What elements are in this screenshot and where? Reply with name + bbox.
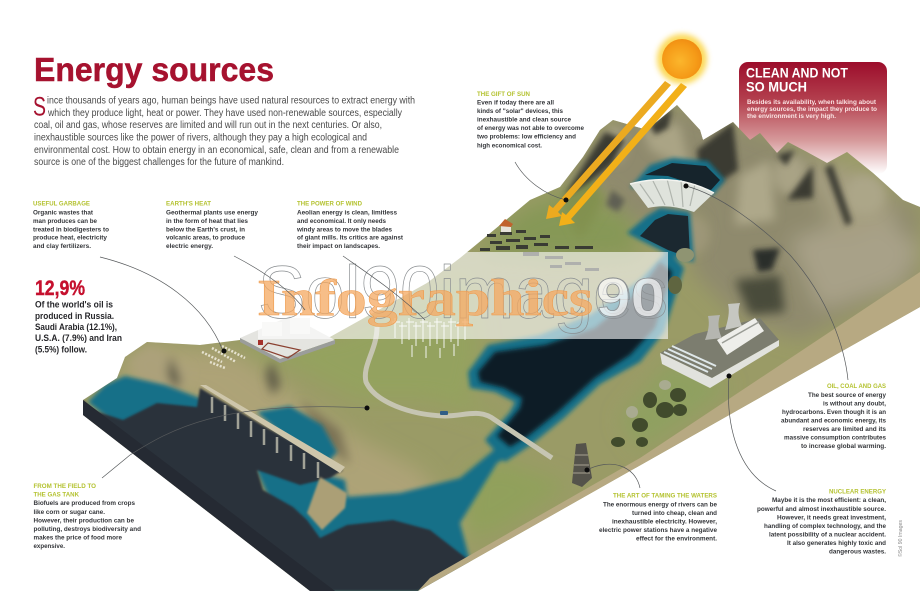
text block: the gift of sun: [477, 91, 584, 149]
watermark: Infographics: [257, 270, 593, 327]
sun: [657, 34, 707, 84]
text block: the art of taming the waters: electric power stations have a negative: [599, 527, 717, 534]
hydro tower: [572, 443, 592, 487]
intro text: source is one of the biggest challenges for the future of mankind.: [34, 157, 284, 168]
watermark: Sol90images: [258, 251, 668, 334]
terrain block illustration: [60, 90, 920, 591]
text block: nuclear energy: handling of complex technology, and the: [764, 523, 886, 530]
text block: from the field to the gas tank: polluting, destroys biodiversity and: [34, 526, 141, 533]
text block: the gift of sun: of energy was not able to overcome: [477, 125, 584, 132]
wind farm: [392, 318, 469, 358]
title: Energy sources: [34, 52, 274, 89]
text block: nuclear energy: [757, 488, 887, 556]
callout: clean and not so much: CLEAN AND NOT: [746, 66, 849, 80]
car: [440, 411, 448, 415]
text block: nuclear energy: Maybe it is the most efficient: a clean,: [772, 497, 886, 504]
text block: useful garbage: man produces can be: [33, 218, 97, 225]
text block: the power of wind: Aeolian energy is clean, limitless: [297, 209, 397, 216]
text block: oil, coal and gas: abundant and economic energy, its: [781, 418, 886, 424]
text block: from the field to the gas tank: FROM THE FIELD TO: [34, 483, 96, 490]
intro text: S: [33, 92, 46, 122]
text block: useful garbage: [33, 200, 109, 250]
text block: from the field to the gas tank: expensive.: [34, 543, 65, 550]
text block: useful garbage: produce heat, electricity: [33, 235, 107, 242]
statistic: oil production: Of the world's oil is: [35, 300, 113, 310]
statistic: oil production: (5.5%) follow.: [35, 344, 87, 354]
text block: useful garbage: USEFUL GARBAGE: [33, 200, 91, 208]
text block: the power of wind: windy areas to move the blades: [296, 226, 392, 233]
text block: the gift of sun: THE GIFT OF SUN: [477, 91, 530, 98]
callout: clean and not so much: Besides its availability, when talking about: [747, 99, 877, 106]
arrow: sun rays: [546, 81, 687, 226]
text block: the art of taming the waters: turned into cheap, clean and: [632, 510, 717, 517]
text block: from the field to the gas tank: However, their production can be: [34, 518, 134, 524]
text block: oil, coal and gas: massive consumption contributes: [784, 434, 886, 442]
text block: useful garbage: Organic wastes that: [33, 209, 94, 216]
text block: the gift of sun: high economical cost.: [477, 142, 542, 149]
geothermal plant: [240, 316, 335, 363]
text block: oil, coal and gas: hydrocarbons. Even though it is an: [782, 409, 886, 416]
text block: nuclear energy: dangerous wastes.: [829, 548, 886, 556]
text block: nuclear energy: latent possibility of a nuclear accident.: [769, 532, 886, 538]
text block: earth's heat: in the form of heat that lies: [166, 218, 248, 225]
text block: earth's heat: Geothermal plants use energy: [166, 209, 258, 216]
statistic: oil production: U.S.A. (7.9%) and Iran: [35, 333, 122, 343]
text block: the gift of sun: inexhaustible and clean source: [477, 117, 571, 124]
text block: from the field to the gas tank: like corn or sugar cane.: [34, 509, 105, 516]
text block: the gift of sun: two problems: low efficiency and: [477, 134, 576, 141]
text block: earth's heat: [166, 200, 258, 250]
text block: nuclear energy: powerful and almost inexhaustible source.: [757, 506, 886, 513]
text block: the power of wind: [296, 200, 404, 250]
nuclear power plant: [660, 303, 779, 388]
text block: the power of wind: THE POWER OF WIND: [297, 200, 362, 208]
intro text: inexhaustible sources like the power of rivers, although they pay a high ecological and: [34, 132, 367, 144]
text block: oil, coal and gas: OIL, COAL AND GAS: [827, 383, 887, 390]
statistic: oil production: Saudi Arabia (12.1%),: [35, 322, 117, 332]
text block: the gift of sun: Even if today there are all: [477, 100, 554, 106]
house: [499, 219, 513, 232]
text block: oil, coal and gas: is without any doubt,: [823, 400, 886, 408]
text block: the power of wind: and economical. It only needs: [297, 218, 386, 225]
text block: earth's heat: electric energy.: [166, 243, 213, 250]
text block: nuclear energy: It also generates highly toxic and: [787, 540, 886, 547]
watermark: 90: [596, 268, 665, 328]
dark solar fields: [480, 230, 599, 271]
text block: oil, coal and gas: The best source of energy: [808, 392, 886, 399]
statistic: oil production: [35, 277, 122, 354]
text block: earth's heat: EARTH'S HEAT: [166, 200, 211, 208]
text block: the art of taming the waters: effect for the environment.: [636, 536, 717, 542]
text block: the gift of sun: kinds of "solar" devices, this: [477, 108, 563, 115]
intro text: coal, oil and gas, whose reserves are limited and will run out in the next centuries. Or also,: [34, 120, 382, 131]
text block: from the field to the gas tank: makes the price of food more: [34, 534, 122, 542]
text block: oil, coal and gas: reserves are limited and its: [803, 426, 886, 433]
leader lines and dots: [100, 162, 848, 491]
text block: from the field to the gas tank: [34, 483, 141, 550]
text block: the power of wind: their impact on landscapes.: [297, 243, 380, 250]
text block: from the field to the gas tank: Biofuels are produced from crops: [34, 500, 135, 507]
water: deep dark areas: [83, 163, 720, 591]
text block: the art of taming the waters: [599, 492, 718, 542]
road: [365, 327, 552, 458]
peninsula: [307, 477, 347, 530]
text block: nuclear energy: However, it needs great investment,: [777, 514, 886, 522]
sheep herd: [202, 346, 245, 368]
copyright: ©Sol 90 Images: [897, 520, 904, 557]
text block: oil, coal and gas: to increase global warming.: [801, 443, 886, 450]
intro text: ince thousands of years ago, human beings have used natural resources to extract energy with: [47, 96, 415, 106]
intro text: environmental cost. How to obtain energy in an economical, safe, clean and from a renewable: [34, 145, 399, 156]
text block: nuclear energy: NUCLEAR ENERGY: [829, 488, 887, 496]
text block: the art of taming the waters: inexhaustible electricity. However,: [612, 518, 717, 526]
text block: earth's heat: volcanic areas, to produce: [166, 235, 245, 242]
callout: clean and not so much: [739, 62, 887, 174]
callout: clean and not so much: energy sources, the impact they produce to: [747, 106, 877, 113]
text block: the art of taming the waters: The enormous energy of rivers can be: [603, 502, 717, 508]
front face of the block: [83, 400, 335, 591]
side edge of the block: [418, 272, 920, 591]
callout: clean and not so much: SO MUCH: [746, 80, 807, 94]
bridge: [200, 385, 345, 478]
text block: earth's heat: below the Earth's crust, in: [166, 226, 245, 233]
callout: clean and not so much: the environment is very high.: [747, 113, 836, 120]
text block: oil, coal and gas: [781, 383, 887, 450]
intro text: [33, 92, 415, 168]
text block: the art of taming the waters: THE ART OF TAMING THE WATERS: [613, 492, 718, 500]
statistic: oil production: 12,9%: [35, 277, 85, 300]
trees: [611, 248, 694, 447]
dam: [630, 179, 714, 212]
water: teal shallows: [88, 158, 725, 591]
intro text: which they produce light, heat or power. They have used non-renewable sources, especially: [47, 108, 402, 119]
statistic: oil production: produced in Russia.: [35, 311, 114, 321]
text block: the power of wind: of giant mills. Its critics are against: [297, 235, 404, 242]
text block: from the field to the gas tank: THE GAS TANK: [34, 492, 79, 498]
text block: useful garbage: treated in biodigesters to: [33, 226, 109, 233]
text block: useful garbage: and clay fertilizers.: [33, 243, 91, 250]
